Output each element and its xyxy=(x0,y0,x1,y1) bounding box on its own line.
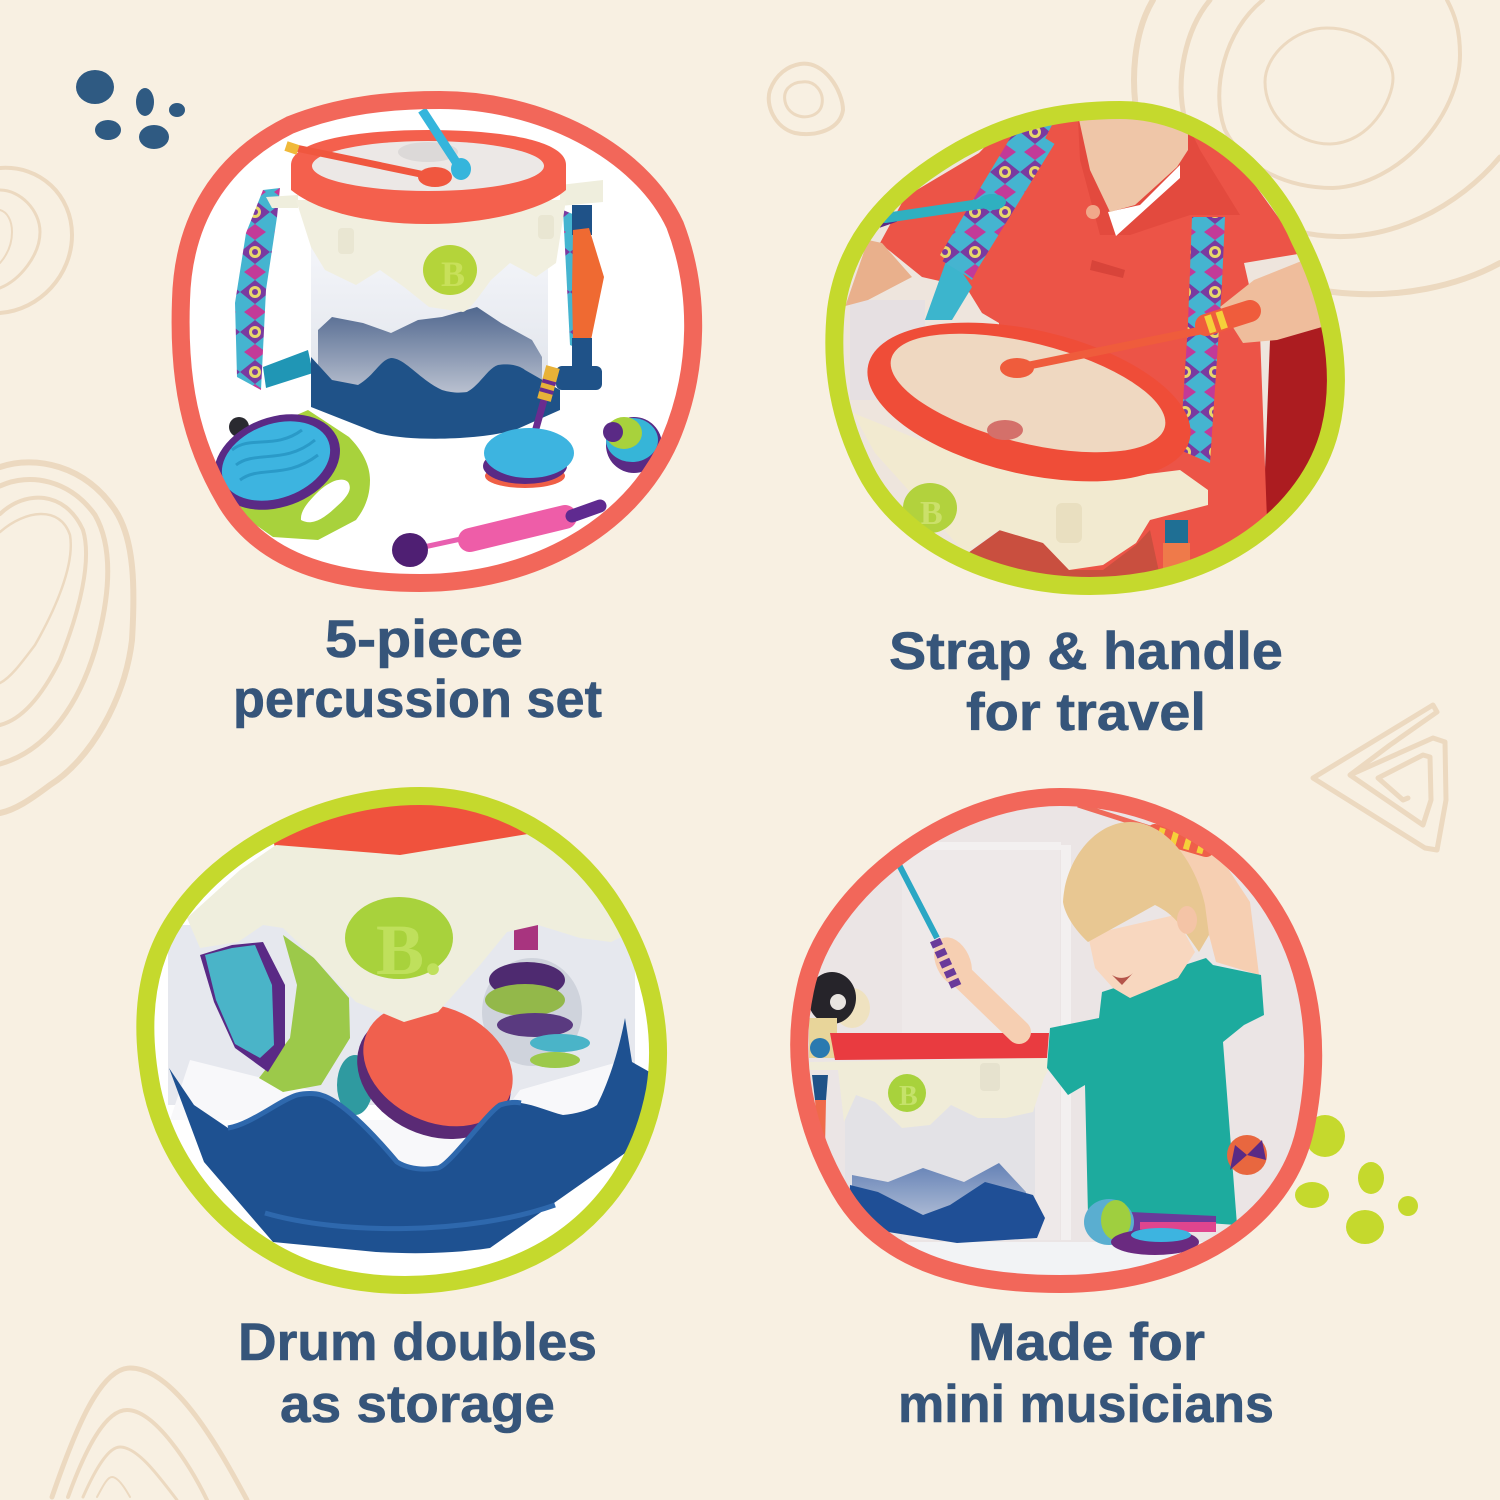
heading: Made for mini musicians xyxy=(898,1313,1274,1434)
shirt xyxy=(880,121,1297,570)
panda toy xyxy=(808,972,870,1058)
whistle xyxy=(392,506,600,567)
panel: drum storage close-up xyxy=(137,787,670,1297)
mallets xyxy=(286,110,471,187)
cream band xyxy=(187,832,625,1022)
heading: Drum doubles as storage xyxy=(238,1313,597,1434)
boy head xyxy=(1063,822,1209,998)
blue mallet xyxy=(878,194,1006,222)
icon: navy dots xyxy=(76,70,185,149)
frame: green blob xyxy=(834,110,1336,586)
frame: red blob xyxy=(181,100,693,583)
strap xyxy=(235,188,581,390)
right arm and mallet xyxy=(1078,805,1259,975)
orange handle xyxy=(556,205,604,390)
floor toys xyxy=(1084,1135,1267,1255)
badge: B. xyxy=(376,910,442,990)
heading: Made for mini musicians: Made for xyxy=(968,1313,1205,1372)
badge xyxy=(423,245,477,295)
heading: 5-piece percussion set xyxy=(233,610,602,729)
red disc xyxy=(337,1006,513,1139)
heading: Drum doubles as storage: Drum doubles xyxy=(238,1313,597,1372)
badge xyxy=(345,897,453,979)
heading: 5-piece percussion set: percussion set xyxy=(233,670,602,729)
icon: green dots xyxy=(1295,1115,1418,1244)
neck and undershirt xyxy=(1078,115,1188,278)
right hand xyxy=(1220,260,1322,343)
straps xyxy=(925,125,1225,463)
red drumstick xyxy=(1000,311,1250,378)
frame: green blob xyxy=(145,796,658,1285)
drum xyxy=(808,1033,1049,1243)
navy base xyxy=(169,1018,655,1253)
left arm xyxy=(846,240,912,306)
badge xyxy=(888,1074,926,1112)
cymbals xyxy=(483,367,574,488)
tambourine xyxy=(216,410,370,540)
panel: child wearing strap xyxy=(826,100,1346,600)
heading: Strap & handle for travel: for travel xyxy=(966,683,1206,742)
shaker ball xyxy=(603,417,662,473)
heading: Strap & handle for travel: Strap & handle xyxy=(889,622,1283,681)
badge: B xyxy=(899,1081,918,1112)
frame: red blob xyxy=(799,797,1313,1284)
heading: Strap & handle for travel xyxy=(889,622,1283,742)
panel: percussion set photo xyxy=(170,90,710,590)
drum xyxy=(854,322,1208,577)
left arm and mallet xyxy=(895,857,1019,1032)
badge xyxy=(903,483,957,533)
drum body xyxy=(266,130,603,439)
panel: boy playing drum xyxy=(790,788,1322,1297)
shaker ball xyxy=(482,925,590,1068)
heading: Made for mini musicians: mini musicians xyxy=(898,1375,1274,1434)
tambourine xyxy=(200,935,350,1092)
badge: B xyxy=(920,495,943,532)
clear drum xyxy=(168,925,635,1105)
red rim xyxy=(274,805,527,855)
heading: Drum doubles as storage: as storage xyxy=(280,1375,555,1434)
badge: B xyxy=(441,254,465,294)
heading: 5-piece percussion set: 5-piece xyxy=(325,610,523,669)
boy shirt xyxy=(1047,958,1264,1225)
